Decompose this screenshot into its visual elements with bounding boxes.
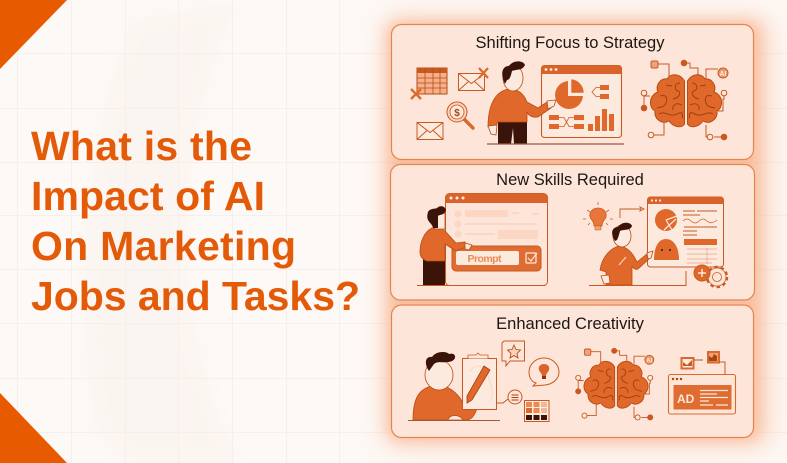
ad window (668, 374, 736, 414)
arrow (620, 207, 644, 218)
person drawing (413, 352, 477, 420)
icon: lightbulb (583, 202, 613, 230)
chart window (542, 66, 622, 138)
corner triangle bottom-left (0, 393, 67, 463)
person presenting (488, 61, 556, 144)
base line (487, 143, 624, 145)
title: What is the (31, 123, 252, 169)
icon: magnifier dollar: $ (454, 108, 460, 119)
colour palette (524, 400, 549, 422)
icon: brain with circuits (641, 60, 728, 140)
prompt window (446, 194, 548, 286)
panel: Enhanced Creativity (392, 305, 754, 438)
person presenting report (600, 223, 653, 285)
title: Jobs and Tasks? (31, 273, 360, 319)
prompt bar: Prompt (468, 253, 502, 265)
heading: creativity: Enhanced Creativity (496, 315, 645, 333)
menu icon (497, 390, 522, 404)
base line (417, 284, 545, 286)
person at prompt (420, 206, 472, 285)
panel: New Skills Required (390, 164, 754, 300)
icon: envelope (417, 122, 443, 140)
icon: gear and plus (694, 265, 726, 286)
corner triangle top-left (0, 0, 67, 69)
panel: Shifting Focus to Strategy (392, 24, 754, 160)
title: On Marketing (31, 223, 296, 269)
base line (408, 420, 500, 422)
title (31, 123, 360, 319)
report window (648, 197, 724, 267)
heading: strategy: Shifting Focus to Strategy (476, 34, 665, 52)
icon: brain with circuits: AI (720, 71, 727, 78)
bulb bubble (529, 358, 559, 386)
icon: crossed envelope (458, 68, 488, 90)
icon: magnifier dollar (447, 102, 473, 128)
ad icons (682, 352, 725, 374)
base line (589, 271, 686, 286)
icon: brain with circuits: AI (646, 358, 653, 365)
panel shadow glow (384, 16, 772, 448)
heading: skills: New Skills Required (496, 171, 644, 189)
ad window: AD (677, 392, 695, 406)
title: Impact of AI (31, 173, 265, 219)
clipboard with pencil (462, 353, 496, 410)
star bubble (502, 341, 524, 366)
icon: brain with circuits (576, 348, 654, 420)
icon: spreadsheet (411, 68, 447, 99)
